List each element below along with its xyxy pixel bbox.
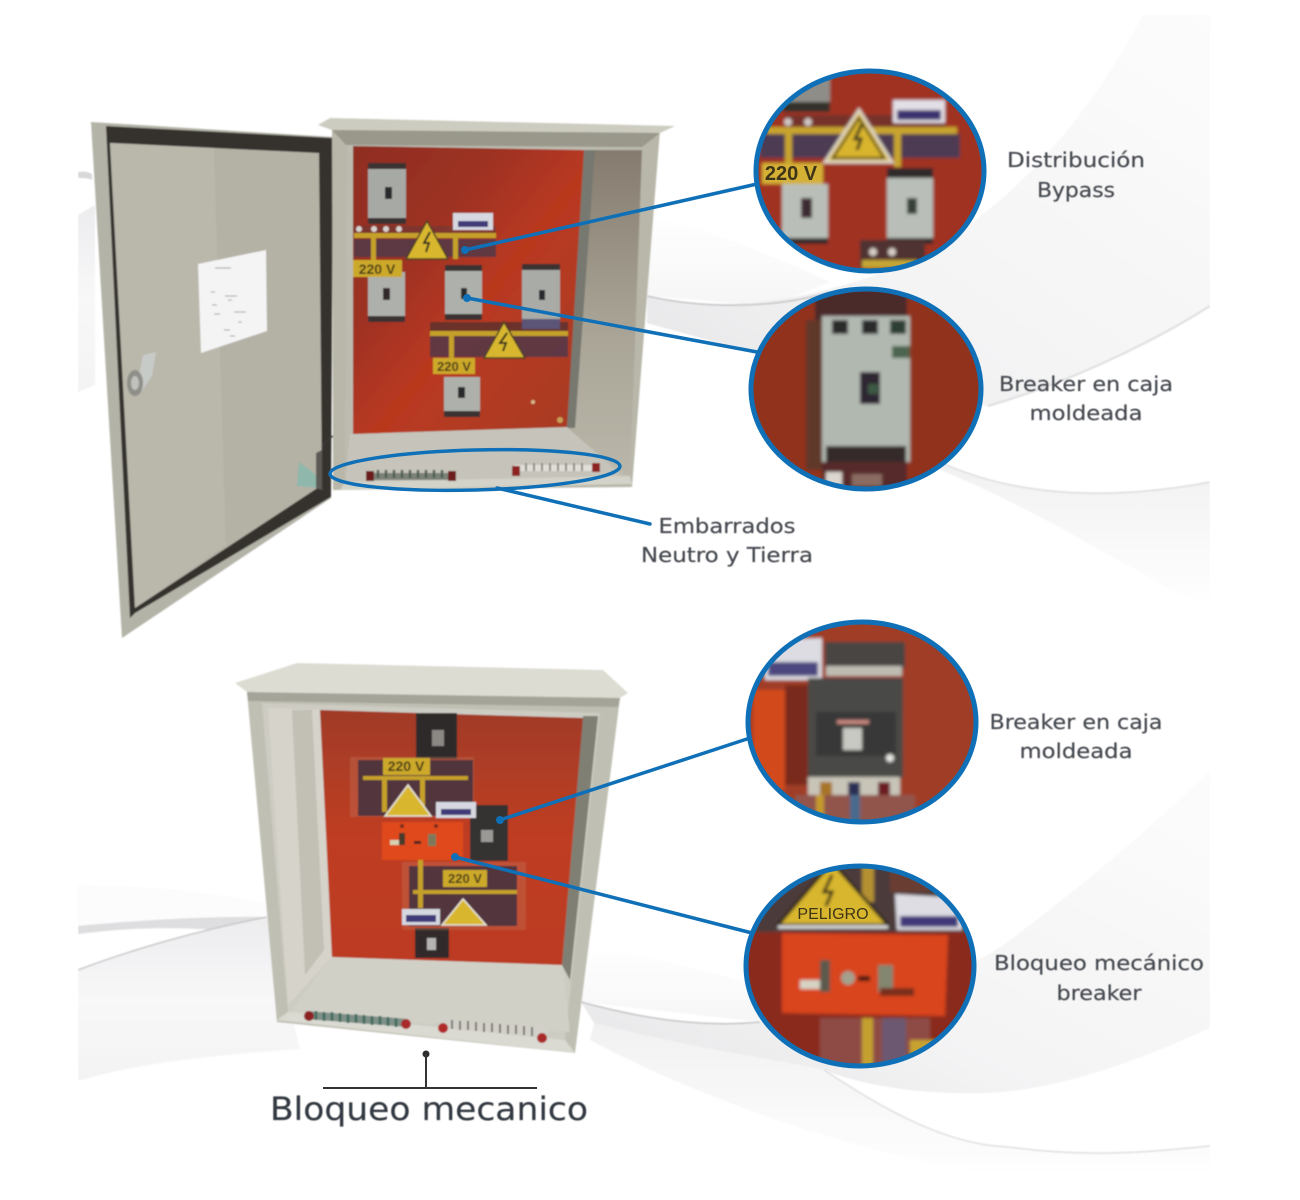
- door paper sheet: [198, 250, 267, 353]
- label: bloqueo mecanico breaker: [994, 951, 1204, 1005]
- cabinet 2: front enclosure: [235, 663, 628, 1053]
- label: breaker en caja moldeada 1: Breaker en caja: [999, 372, 1173, 396]
- cabinet 1: open door enclosure: [91, 118, 675, 638]
- label: breaker en caja moldeada 2: moldeada: [1020, 739, 1132, 763]
- door: [91, 122, 352, 638]
- breakers panel 2: [415, 713, 508, 958]
- bus bars lower group: 220 V: [437, 359, 471, 374]
- door sticker: [297, 462, 320, 488]
- callout dots: [451, 246, 504, 861]
- bus bars upper group: 220 V: [388, 758, 425, 774]
- 220 V tag text: 220 V: [765, 163, 818, 185]
- label: embarrados neutro y tierra: Neutro y Tierra: [641, 543, 813, 567]
- red back panel: [320, 710, 583, 965]
- bus bars top group: [353, 213, 496, 277]
- enclosure body: [318, 118, 675, 490]
- peligro sign text: PELIGRO: [797, 906, 869, 923]
- background waves: [78, 171, 1210, 1154]
- door handle: [127, 352, 156, 396]
- callout lines: [455, 184, 757, 933]
- caption: bloqueo mecanico: Bloqueo mecanico: [270, 1090, 588, 1128]
- magnifier: mechanical lock: [744, 862, 976, 1068]
- red back panel: [353, 146, 584, 434]
- label: distribucion bypass: Bypass: [1037, 178, 1115, 202]
- bus bars lower group: [402, 860, 526, 930]
- label: embarrados neutro y tierra: [641, 514, 813, 567]
- bus bars lower group: 220 V: [448, 871, 482, 886]
- bus bars lower group: [430, 319, 568, 374]
- ellipse around terminal bars: [330, 446, 620, 494]
- terminal bars: [304, 1011, 547, 1043]
- magnifier: molded case breaker 1: [749, 287, 983, 492]
- bus bars upper group: [350, 757, 476, 818]
- label: breaker en caja moldeada 1: moldeada: [1030, 401, 1142, 425]
- interior walls: [340, 145, 642, 490]
- magnifier: molded case breaker 2: [746, 620, 978, 825]
- label: bloqueo mecanico breaker: Bloqueo mecánico: [994, 951, 1204, 975]
- magnifier: distribution bypass: [754, 69, 986, 273]
- label: distribucion bypass: Distribución: [1007, 148, 1145, 172]
- label: bloqueo mecanico breaker: breaker: [1056, 981, 1142, 1005]
- bus bars top group: 220 V: [359, 261, 396, 277]
- mechanical lock plate: [382, 822, 463, 860]
- label: embarrados neutro y tierra: Embarrados: [658, 514, 796, 538]
- breakers panel 1: [368, 163, 560, 417]
- label: breaker en caja moldeada 2: Breaker en caja: [990, 710, 1162, 734]
- label: distribucion bypass: [1007, 148, 1145, 202]
- neutral and ground terminal bars: [366, 463, 600, 481]
- enclosure body: [235, 663, 628, 1053]
- label: breaker en caja moldeada 1: [999, 372, 1173, 425]
- label: breaker en caja moldeada 2: [990, 710, 1162, 763]
- bottom bracket pointer: [323, 1050, 537, 1088]
